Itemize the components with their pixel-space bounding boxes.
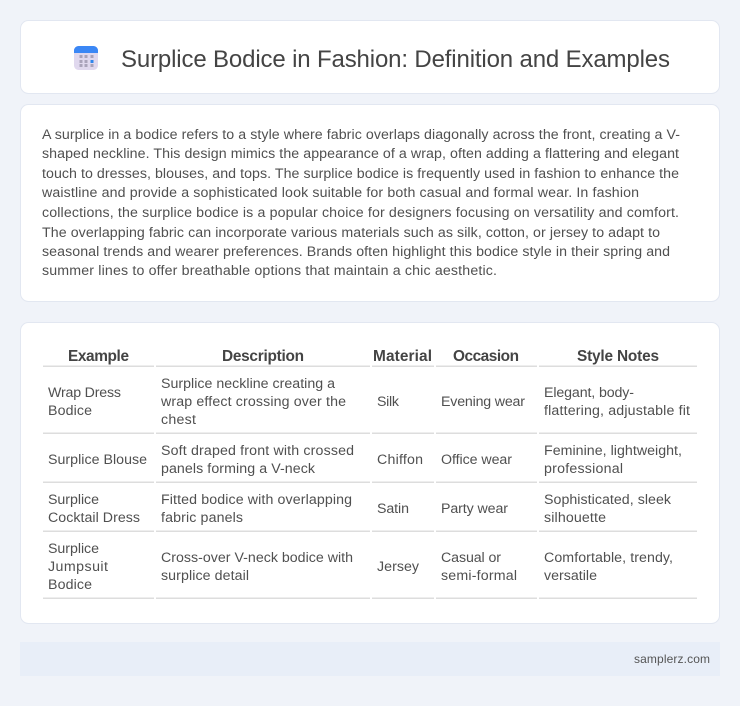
panel: examples table	[20, 322, 720, 624]
table row: surplice jumpsuit bodice: Comfortable, trendy,	[544, 550, 673, 566]
table row: surplice jumpsuit bodice: Casual or	[441, 550, 501, 566]
table row: surplice cocktail dress: Fitted bodice with overlapping	[161, 492, 352, 508]
table row: surplice blouse: Feminine, lightweight,	[544, 443, 682, 459]
text block: description paragraph: waistline and provide a sophisticated look suitable for both casual and formal wear. In fashion	[41, 185, 639, 201]
table row: wrap dress bodice: Surplice neckline creating a	[161, 376, 335, 392]
table row: surplice cocktail dress: Sophisticated, sleek	[544, 492, 672, 508]
text block: description paragraph	[41, 127, 680, 279]
table header row	[68, 348, 659, 365]
title: Surplice Bodice in Fashion: Definition and Examples	[121, 46, 670, 73]
footer bar	[20, 642, 720, 676]
table row: surplice cocktail dress: Party wear	[441, 501, 508, 517]
table row: surplice jumpsuit bodice	[48, 541, 673, 593]
table row: wrap dress bodice: Evening wear	[441, 394, 525, 410]
table row: surplice cocktail dress	[48, 492, 672, 526]
text block: description paragraph: seasonal trends and wearer preferences. Brands often highlight this bodice style in their spring and	[42, 244, 670, 260]
table row: surplice blouse: professional	[544, 461, 623, 477]
text block: description paragraph: summer lines to offer breathable options that maintain a chic aesthetic.	[42, 263, 497, 279]
table row: surplice blouse: Surplice Blouse	[48, 452, 147, 468]
table header row: Occasion	[453, 348, 519, 365]
table row: surplice cocktail dress: Satin	[377, 501, 409, 517]
table row: wrap dress bodice: chest	[161, 412, 196, 428]
table row: surplice cocktail dress: fabric panels	[161, 510, 243, 526]
table header row: Material	[373, 348, 432, 365]
table row: surplice cocktail dress: Surplice	[48, 492, 99, 508]
table header row: Example	[68, 348, 129, 365]
table row: surplice blouse: Soft draped front with crossed	[161, 443, 354, 459]
table row: surplice jumpsuit bodice: Bodice	[48, 577, 92, 593]
panel: title header	[20, 20, 720, 94]
table row: wrap dress bodice	[48, 376, 690, 428]
table row: wrap dress bodice: Bodice	[48, 403, 92, 419]
footer source text: samplerz.com	[634, 652, 710, 666]
text block: description paragraph: touch to dresses, blouses, and tops. The surplice bodice is frequently used in fashion to enhance the	[42, 166, 679, 182]
panel: description	[20, 104, 720, 302]
table row: wrap dress bodice: flattering, adjustable fit	[544, 403, 690, 419]
table row: surplice blouse: panels forming a V-neck	[161, 461, 316, 477]
table row: wrap dress bodice: wrap effect crossing over the	[160, 394, 346, 410]
table row: surplice cocktail dress: silhouette	[544, 510, 606, 526]
table row: surplice jumpsuit bodice: Surplice	[48, 541, 99, 557]
table row: surplice blouse: Chiffon	[377, 452, 423, 468]
table row: surplice cocktail dress: Cocktail Dress	[48, 510, 140, 526]
table row: wrap dress bodice: Wrap Dress	[48, 385, 121, 401]
table row: surplice jumpsuit bodice: semi-formal	[441, 568, 517, 584]
text block: description paragraph: shaped neckline. This design mimics the appearance of a wrap, often adding a flattering and elegant	[42, 146, 679, 162]
table row: surplice blouse: Office wear	[441, 452, 512, 468]
table row: surplice jumpsuit bodice: Jumpsuit	[48, 559, 108, 575]
icon: calendar	[74, 46, 98, 70]
table header row: Style Notes	[577, 348, 659, 365]
text block: description paragraph: collections, the surplice bodice is a popular choice for designers focusing on versatility and comfort.	[42, 205, 679, 221]
table row: surplice jumpsuit bodice: surplice detail	[161, 568, 249, 584]
table row: surplice jumpsuit bodice: Cross-over V-neck bodice with	[161, 550, 353, 566]
table row: surplice jumpsuit bodice: versatile	[544, 568, 597, 584]
table row: wrap dress bodice: Silk	[377, 394, 400, 410]
text block: description paragraph: A surplice in a bodice refers to a style where fabric overlaps diagonally across the front, creating a V-	[42, 127, 680, 143]
table header row: Description	[222, 348, 304, 365]
table row: wrap dress bodice: Elegant, body-	[544, 385, 634, 401]
text block: description paragraph: The overlapping fabric can incorporate various materials such as silk, cotton, or jersey to adapt to	[42, 225, 660, 241]
table row: surplice jumpsuit bodice: Jersey	[377, 559, 420, 575]
table row: surplice blouse	[48, 443, 682, 477]
